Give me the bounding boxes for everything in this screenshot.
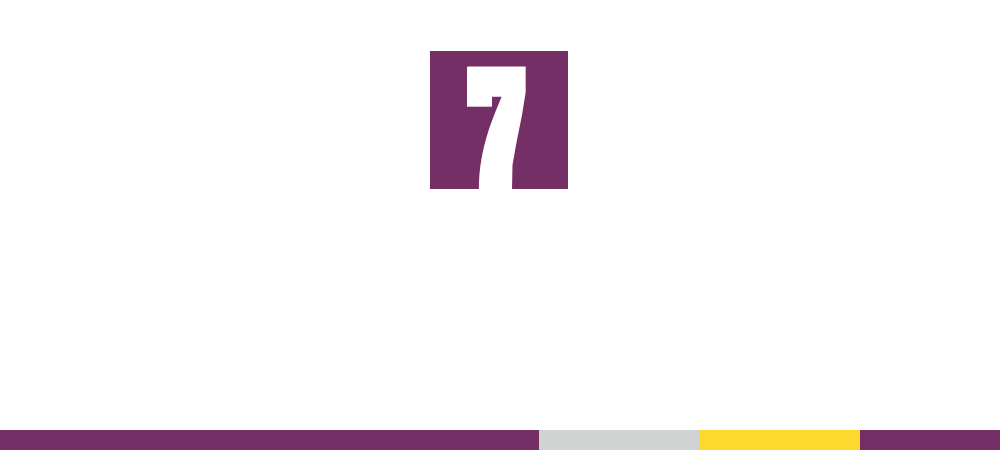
bottom colour bar	[0, 430, 1000, 450]
numeral seven	[467, 66, 526, 189]
number badge	[430, 51, 568, 189]
numeral seven: 7	[467, 36, 527, 226]
